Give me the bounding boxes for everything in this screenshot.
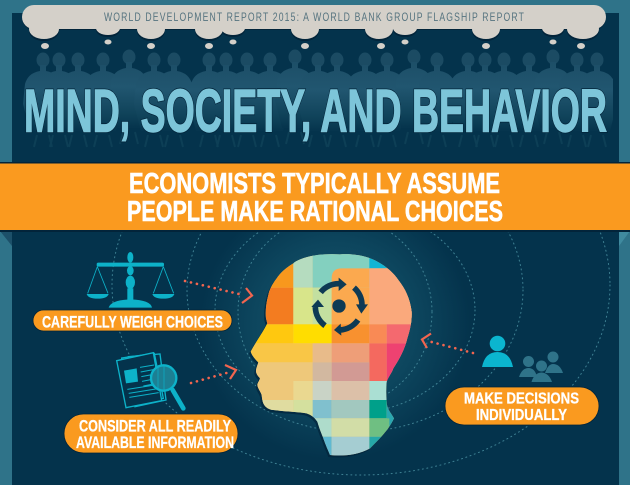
arrow: scale to head [185, 281, 252, 303]
icon: group of people [519, 352, 563, 382]
banner heading [127, 168, 503, 228]
make decisions pill: MAKE DECISIONS [464, 390, 579, 408]
thought cloud header [22, 5, 606, 49]
banner heading: PEOPLE MAKE RATIONAL CHOICES [127, 196, 503, 228]
crowd silhouettes [23, 50, 617, 147]
icon: circular arrows [311, 278, 368, 336]
dotted orbit rings [112, 232, 610, 476]
arrow: documents to head [191, 365, 236, 383]
make decisions pill [445, 387, 599, 425]
icon: documents with magnifier [117, 353, 183, 408]
carefully weigh choices pill: CAREFULLY WEIGH CHOICES [42, 312, 223, 332]
carefully weigh choices pill [33, 310, 232, 332]
arrow: individuals to head [422, 334, 473, 353]
icon: balance scale [87, 252, 174, 308]
consider all information pill: CONSIDER ALL READILY [79, 417, 231, 436]
consider all information pill: AVAILABLE INFORMATION [76, 433, 234, 452]
central glow [195, 231, 475, 461]
cloud shape [22, 5, 606, 49]
consider all information pill [64, 414, 238, 453]
banner heading: ECONOMISTS TYPICALLY ASSUME [129, 168, 500, 200]
head graphic [247, 252, 417, 462]
orange banner [0, 162, 630, 232]
icon: individual person [482, 336, 513, 367]
make decisions pill: INDIVIDUALLY [476, 407, 567, 424]
